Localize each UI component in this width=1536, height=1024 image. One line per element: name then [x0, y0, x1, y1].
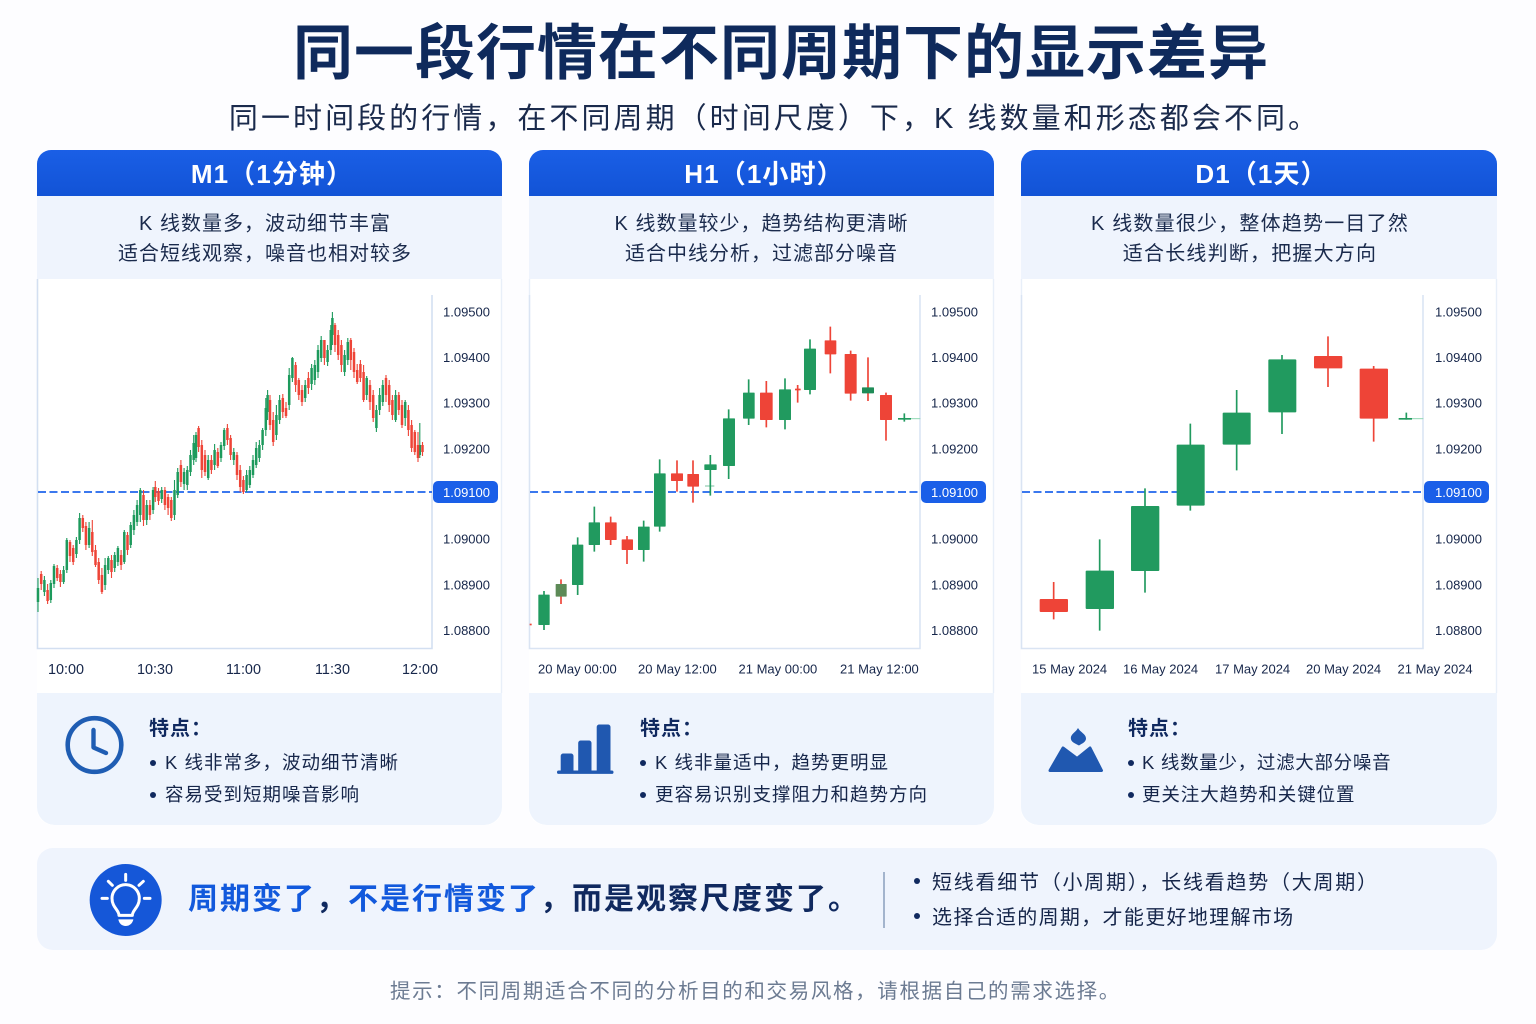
M1 features heading: 特点：	[149, 718, 212, 740]
panel: M1	[37, 150, 502, 825]
M1 header: M1（1分钟）	[191, 159, 353, 189]
H1 time axis	[538, 662, 919, 676]
takeaway bullet 2: 选择合适的周期，才能更好地理解市场	[932, 907, 1294, 929]
H1 price axis	[931, 304, 978, 638]
D1 bullet 2: 更关注大趋势和关键位置	[1142, 784, 1355, 805]
title: 同一段行情在不同周期下的显示差异	[293, 20, 1269, 87]
H1 description	[529, 196, 994, 279]
M1 description	[37, 196, 502, 279]
D1 time axis	[1032, 662, 1473, 676]
D1 price badge	[1424, 481, 1489, 503]
D1 time axis: 16 May 2024	[1123, 662, 1198, 676]
D1 header	[1021, 150, 1497, 196]
M1 time axis: 12:00	[402, 662, 438, 678]
H1 header: H1（1小时）	[684, 159, 844, 189]
M1 bullet 2: 容易受到短期噪音影响	[165, 784, 360, 805]
H1 time axis: 21 May 12:00	[840, 662, 919, 676]
M1 candles	[38, 312, 422, 612]
M1 header	[37, 150, 502, 196]
M1 price axis: 1.09200	[443, 442, 490, 456]
M1 price axis: 1.09400	[443, 350, 490, 365]
D1 time axis: 21 May 2024	[1398, 662, 1473, 676]
H1 candles	[530, 327, 920, 630]
D1 price axis: 1.09500	[1435, 304, 1482, 320]
H1 price axis: 1.09200	[931, 442, 978, 456]
H1 bullet 2: 更容易识别支撑阻力和趋势方向	[655, 784, 928, 805]
D1 time axis: 20 May 2024	[1306, 662, 1381, 676]
D1 features	[1021, 693, 1497, 825]
divider	[883, 872, 885, 928]
M1 time axis: 10:00	[48, 662, 84, 678]
D1 description: K 线数量很少，整体趋势一目了然	[1091, 213, 1409, 235]
H1 header	[529, 150, 994, 196]
H1 price badge	[921, 481, 986, 503]
H1 time axis: 20 May 12:00	[638, 662, 717, 676]
takeaway bullet 1: 短线看细节（小周期），长线看趋势（大周期）	[932, 872, 1379, 894]
D1 price axis	[1435, 304, 1482, 638]
icon: light bulb	[90, 864, 162, 936]
D1 features heading: 特点：	[1128, 718, 1191, 740]
H1 time axis: 20 May 00:00	[538, 662, 617, 676]
takeaway headline: 周期变了，不是行情变了，而是观察尺度变了。	[188, 883, 860, 916]
panel: key takeaway	[37, 848, 1497, 950]
D1 price axis: 1.09400	[1435, 350, 1482, 365]
D1 price axis: 1.08900	[1435, 578, 1482, 592]
D1 header: D1（1天）	[1195, 159, 1328, 189]
H1 description: 适合中线分析，过滤部分噪音	[625, 243, 898, 265]
M1 time axis: 11:00	[226, 662, 261, 678]
D1 time axis: 15 May 2024	[1032, 662, 1107, 676]
panel: D1	[1021, 150, 1497, 825]
M1 candlestick chart	[36, 279, 502, 693]
footer tip: 提示：不同周期适合不同的分析目的和交易风格，请根据自己的需求选择。	[390, 980, 1121, 1003]
icon: clock	[65, 716, 124, 774]
H1 time axis: 21 May 00:00	[738, 662, 817, 676]
H1 features	[529, 693, 994, 825]
D1 price badge: 1.09100	[1435, 485, 1482, 500]
M1 price axis	[443, 304, 490, 638]
M1 price axis: 1.09500	[443, 304, 490, 320]
H1 price axis: 1.09400	[931, 350, 978, 365]
M1 price badge: 1.09100	[443, 485, 490, 500]
M1 time axis: 10:30	[137, 662, 173, 678]
M1 features	[37, 693, 502, 825]
D1 candlestick chart	[1020, 279, 1497, 693]
H1 bullet 1: K 线非量适中，趋势更明显	[655, 752, 889, 773]
M1 time axis	[48, 662, 438, 678]
D1 price axis: 1.09200	[1435, 442, 1482, 456]
M1 price axis: 1.09000	[443, 532, 490, 546]
H1 price axis: 1.09000	[931, 532, 978, 546]
H1 price axis: 1.09500	[931, 304, 978, 320]
D1 price axis: 1.09000	[1435, 532, 1482, 546]
D1 bullet 1: K 线数量少，过滤大部分噪音	[1142, 752, 1391, 773]
H1 candlestick chart	[528, 279, 994, 693]
H1 price axis: 1.08900	[931, 578, 978, 592]
M1 description: K 线数量多，波动细节丰富	[139, 213, 391, 235]
H1 price axis: 1.08800	[931, 623, 978, 638]
M1 time axis: 11:30	[315, 662, 350, 678]
D1 price axis: 1.08800	[1435, 623, 1482, 638]
M1 price axis: 1.09300	[443, 396, 490, 410]
M1 price axis: 1.08800	[443, 623, 490, 638]
M1 price axis: 1.08900	[443, 578, 490, 592]
M1 description: 适合短线观察，噪音也相对较多	[118, 243, 412, 265]
H1 price badge: 1.09100	[931, 485, 978, 500]
H1 description: K 线数量较少，趋势结构更清晰	[615, 213, 908, 235]
panel: H1	[529, 150, 994, 825]
icon: bar chart	[557, 724, 614, 774]
M1 price badge	[433, 481, 498, 503]
H1 features heading: 特点：	[640, 718, 703, 740]
subtitle: 同一时间段的行情，在不同周期（时间尺度）下，K 线数量和形态都会不同。	[229, 103, 1320, 135]
D1 time axis: 17 May 2024	[1215, 662, 1290, 676]
D1 description	[1021, 196, 1497, 279]
H1 price axis: 1.09300	[931, 396, 978, 410]
M1 bullet 1: K 线非常多，波动细节清晰	[165, 752, 399, 773]
D1 description: 适合长线判断，把握大方向	[1123, 243, 1377, 265]
D1 price axis: 1.09300	[1435, 396, 1482, 410]
D1 candles	[1040, 336, 1423, 631]
icon: mountain	[1048, 728, 1104, 772]
